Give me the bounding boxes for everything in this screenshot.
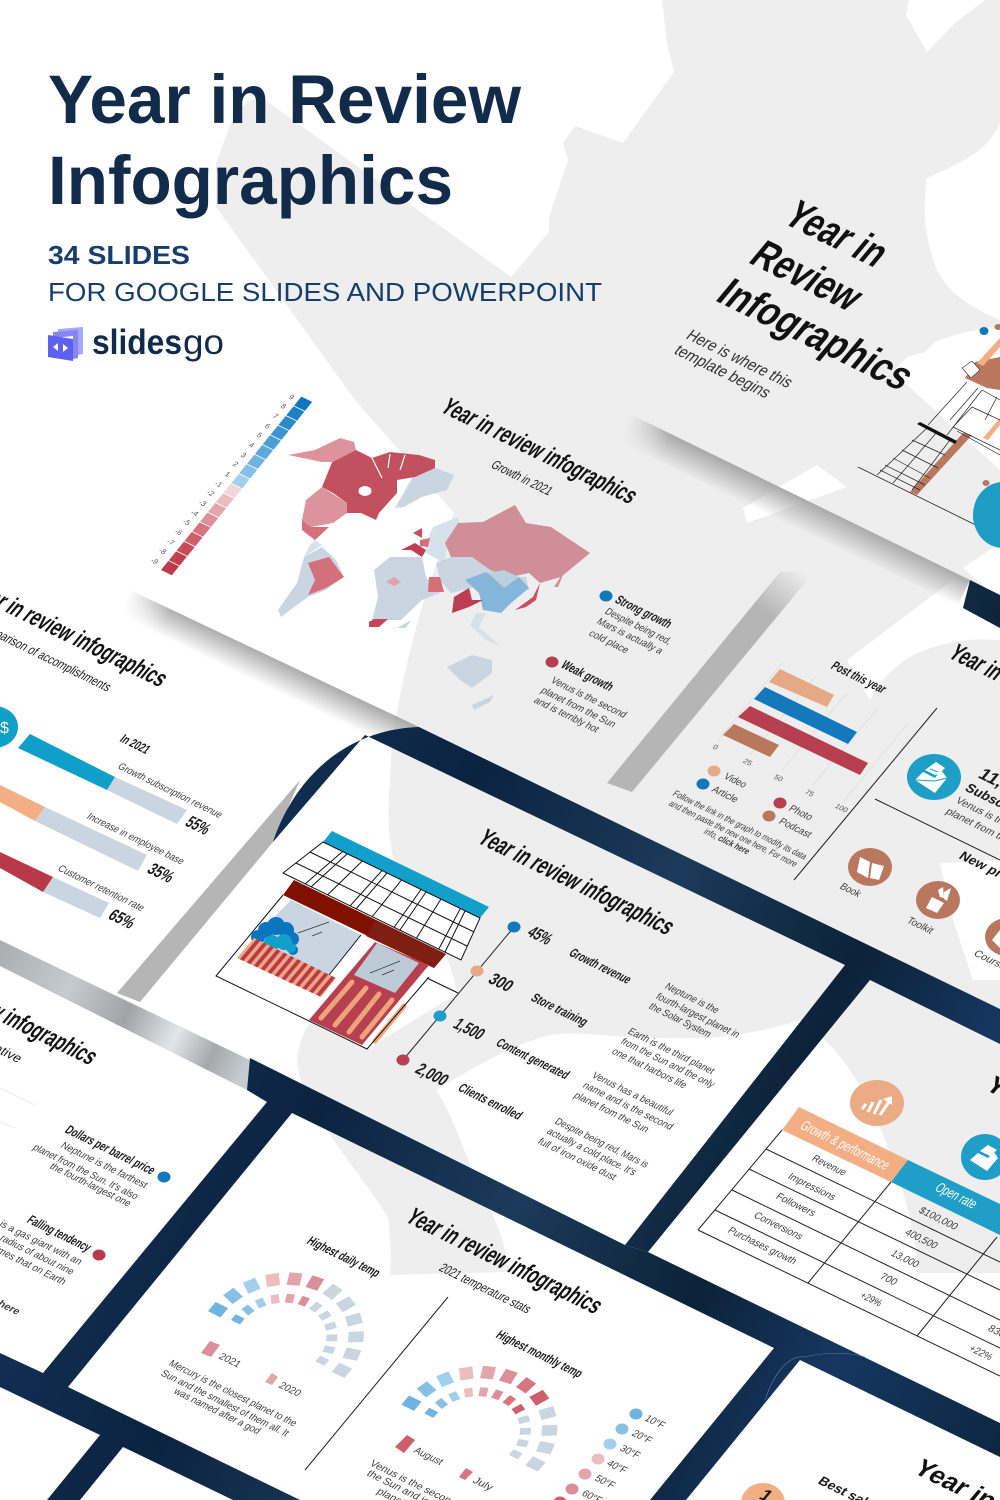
bar chart <box>711 662 908 814</box>
chart: highest daily temp: Sun and the smallest of them all. It <box>158 1368 292 1439</box>
icon: book: Book <box>837 881 864 900</box>
table labels: Revenue <box>809 1153 849 1178</box>
row: content generated <box>449 1015 676 1135</box>
chart note <box>666 789 810 869</box>
bar: customer retention: Customer retention rate <box>55 863 147 914</box>
table header: Growth & performance <box>796 1118 894 1173</box>
table labels: Followers <box>773 1191 818 1219</box>
slide title: Year in review infographics <box>435 393 645 509</box>
legend: strong growth: Strong growth <box>612 593 676 631</box>
row: store training: 300 <box>484 970 518 995</box>
colour scale labels: -2 <box>205 488 216 498</box>
bar: employee base <box>0 785 187 886</box>
row: growth revenue: 45% <box>523 923 557 948</box>
icon: envelope <box>907 754 961 800</box>
row: growth revenue: fourth-largest planet in <box>653 991 743 1040</box>
slide shadows and gaps <box>0 414 970 1090</box>
bar: customer retention <box>0 852 147 932</box>
row: growth revenue: Growth revenue <box>566 946 635 986</box>
legend: strong growth <box>586 590 676 657</box>
chart: highest daily temp: Mercury is the closest planet to the <box>166 1358 300 1429</box>
timeline <box>396 922 520 1066</box>
subtitle: 34 SLIDES <box>48 242 190 270</box>
logo: go <box>183 323 224 362</box>
row: growth revenue <box>523 923 743 1040</box>
title: Year in Review <box>48 61 521 138</box>
row: growth revenue: Neptune is the <box>662 981 722 1016</box>
heading block <box>48 61 602 362</box>
subtitle <box>48 242 602 307</box>
chart: highest monthly temp: August <box>411 1445 446 1468</box>
icon: toolkit <box>904 881 960 936</box>
chart: highest daily temp: was named after a god <box>170 1386 263 1437</box>
slide subtitle: Growth in 2021 <box>488 458 556 498</box>
temperature legend: 50°F <box>592 1473 618 1491</box>
bar chart: 0 <box>711 743 720 751</box>
chart: highest monthly temp <box>364 1328 590 1500</box>
temperature legend: 40°F <box>604 1458 630 1476</box>
legend: strong growth: Despite being red, <box>602 606 674 647</box>
row: clients enrolled: Clients enrolled <box>455 1081 526 1122</box>
slide title: Review <box>741 233 873 320</box>
bar: subscription revenue: In 2021 <box>117 732 154 757</box>
row: clients enrolled: Despite being red, Mars is <box>552 1116 651 1170</box>
panel: posts slide <box>666 639 1000 972</box>
colour scale labels: -7 <box>165 537 176 547</box>
world map <box>278 438 590 710</box>
colour scale labels: 1 <box>223 470 232 478</box>
legend: dollars per barrel: Dollars per barrel price <box>62 1123 159 1177</box>
chart legend: Podcast <box>776 816 814 840</box>
stat: subscribers <box>943 765 1000 856</box>
icon: growth chart <box>850 1080 904 1126</box>
colour scale labels: 9 <box>287 393 296 401</box>
table values: 13,000 <box>888 1248 922 1270</box>
table values <box>857 1205 1000 1363</box>
legend: falling tendency: Falling tendency <box>24 1213 95 1254</box>
icon: toolkit: Toolkit <box>904 915 936 936</box>
colour scale labels: 3 <box>239 451 248 459</box>
colour scale labels: -9 <box>149 556 160 566</box>
temperature legend <box>554 1408 668 1500</box>
colour scale labels: 5 <box>255 431 264 439</box>
chart: highest daily temp <box>158 1234 397 1439</box>
chart: highest daily temp: 2021 <box>216 1351 244 1370</box>
colour scale labels: 7 <box>271 412 280 420</box>
legend: dollars per barrel: planet from the Sun. It's also <box>30 1142 141 1202</box>
colour scale labels: -6 <box>173 527 184 537</box>
slide subtitle: Here is where this <box>682 326 797 391</box>
panel: performance table slide <box>698 1071 1000 1376</box>
chart legend: Article <box>709 784 741 805</box>
table values: +22% <box>966 1343 995 1363</box>
colour scale labels: 6 <box>263 422 272 430</box>
legend: strong growth: cold place <box>586 628 632 656</box>
row: store training <box>484 970 718 1091</box>
logo <box>48 323 224 362</box>
colour scale labels <box>149 393 296 566</box>
colour scale labels: -5 <box>181 517 192 527</box>
table labels: Impressions <box>785 1171 839 1203</box>
panel: accomplishments slide <box>0 576 225 932</box>
panel: title slide <box>670 193 1000 548</box>
table values: 400,500 <box>902 1227 940 1251</box>
row: clients enrolled: 2,000 <box>411 1060 453 1089</box>
table grid <box>698 1130 1000 1376</box>
background silhouette <box>216 0 1000 1275</box>
colour scale labels: 8 <box>279 402 288 410</box>
bar chart: 100 <box>833 802 850 814</box>
icon: book <box>837 848 892 900</box>
bar chart: 25 <box>741 757 754 767</box>
chart note: info, click here <box>701 827 752 857</box>
colour scale labels: -4 <box>189 508 200 518</box>
table labels: Conversions <box>751 1210 805 1242</box>
chart title: Post this year <box>828 659 890 696</box>
chart legend: Video <box>721 771 750 790</box>
slide title <box>708 193 924 399</box>
row: store training: Store training <box>528 991 592 1029</box>
bar: subscription revenue: 55% <box>181 813 215 838</box>
icon: circle: $ <box>0 720 9 737</box>
title: Infographics <box>48 142 453 219</box>
chart: highest daily temp: Highest daily temp <box>304 1234 384 1280</box>
row: content generated: Content generated <box>493 1036 573 1082</box>
legend: weak growth: Venus is the second <box>548 675 630 720</box>
logo: slides <box>92 323 182 362</box>
legend: dollars per barrel <box>30 1123 170 1209</box>
number badge <box>741 1483 785 1500</box>
table values: 700 <box>877 1271 900 1288</box>
table labels <box>725 1153 849 1267</box>
chart: highest monthly temp: July <box>470 1475 496 1493</box>
slide subtitle: template begins <box>670 341 775 401</box>
bar: customer retention: 65% <box>104 906 140 932</box>
row: content generated: planet from the Sun <box>571 1090 652 1135</box>
bar: employee base: 35% <box>143 860 179 886</box>
illustration: store <box>216 831 489 1049</box>
chart legend: Photo <box>786 803 815 823</box>
icon: email <box>961 1134 1000 1180</box>
row: store training: Earth is the third planet <box>625 1026 717 1077</box>
bar: employee base: Increase in employee base <box>84 811 187 867</box>
colour scale labels: -1 <box>213 479 224 489</box>
panel: world map slide <box>149 393 676 735</box>
navy background bands <box>0 580 1000 1500</box>
slide title: Year in review infographics <box>472 824 682 940</box>
row: clients enrolled: full of iron oxide dust <box>535 1136 619 1183</box>
bar chart: 50 <box>772 773 785 783</box>
table values: +29% <box>857 1290 885 1309</box>
colour scale labels: 4 <box>247 441 256 449</box>
legend: falling tendency <box>0 1205 106 1317</box>
row: store training: from the Sun and the only <box>618 1036 718 1090</box>
chart note: and then paste the new one here. For more <box>666 799 800 869</box>
legend: weak growth: and is terribly hot <box>531 695 602 735</box>
temperature legend: 10°F <box>642 1413 668 1431</box>
slide title: Infographics <box>708 271 924 399</box>
chart note: Follow the link in the graph to modify its data <box>670 789 810 862</box>
temperature legend: 20°F <box>629 1428 655 1446</box>
row: content generated: 1,500 <box>449 1015 489 1043</box>
colour scale labels: -3 <box>197 498 208 508</box>
row: store training: one that harbors life <box>609 1046 690 1091</box>
row: content generated: name and is the second <box>580 1080 676 1132</box>
panel: temperature slide <box>158 1203 668 1500</box>
row: growth revenue: the Solar System <box>646 1001 714 1040</box>
legend: strong growth: Mars is actually a <box>594 616 666 657</box>
row: clients enrolled <box>411 1060 651 1183</box>
icon: course <box>971 918 1000 972</box>
table labels: Purchases growth <box>725 1225 799 1267</box>
title <box>48 61 521 219</box>
subtitle: FOR GOOGLE SLIDES AND POWERPOINT <box>48 279 602 307</box>
bar: subscription revenue: Growth subscription revenue <box>115 761 225 821</box>
legend: weak growth <box>531 656 630 735</box>
colour scale labels: 2 <box>231 460 240 468</box>
legend: dollars per barrel: Neptune is the farthest <box>58 1140 150 1191</box>
row: clients enrolled: actually a cold place. It's <box>544 1126 639 1178</box>
table values: $100,000 <box>916 1205 961 1232</box>
bar: subscription revenue <box>18 732 225 838</box>
temperature legend: 30°F <box>617 1443 643 1461</box>
legend: weak growth: Weak growth <box>558 658 617 694</box>
colour scale <box>161 397 312 575</box>
slide title: Year in review infographics <box>400 1203 610 1319</box>
chart legend <box>696 766 815 840</box>
row: content generated: Venus has a beautiful <box>589 1070 676 1118</box>
panel: best sale slide <box>741 1454 1000 1500</box>
panel: store slide <box>216 824 743 1183</box>
slide title: Year in <box>775 193 899 275</box>
chart: highest monthly temp: Highest monthly temp <box>493 1328 586 1380</box>
chart: highest daily temp: 2020 <box>276 1380 304 1399</box>
legend: weak growth: planet from the Sun <box>538 685 619 730</box>
slide subtitle: 2021 temperature stats <box>436 1261 535 1316</box>
legend: dollars per barrel: the fourth-largest one <box>47 1161 134 1209</box>
table header <box>782 1107 1000 1235</box>
illustration: person on ladder <box>858 324 1000 548</box>
colour scale labels: -8 <box>157 546 168 556</box>
panel: narrative slide <box>0 954 171 1317</box>
bar chart: 75 <box>803 788 816 798</box>
icon: circle <box>0 706 18 748</box>
